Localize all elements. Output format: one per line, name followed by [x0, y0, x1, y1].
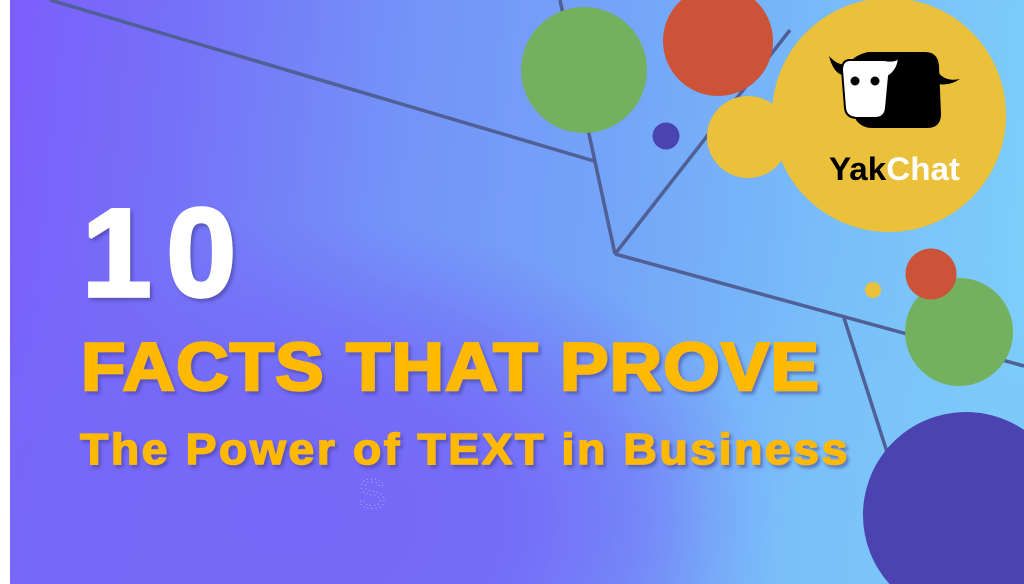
icon: yakchat logo [829, 52, 960, 128]
network lines [50, 0, 1024, 452]
circle: small yellow [865, 282, 881, 298]
circle: green top [521, 7, 647, 133]
headline: FACTS THAT PROVE [81, 329, 820, 405]
circle: green right [905, 278, 1013, 386]
circle: yakchat logo background [772, 0, 1006, 232]
circle: large indigo [863, 412, 1024, 584]
number 10: 10 [82, 184, 236, 323]
faint dotted mark: S [358, 470, 386, 517]
subheadline: The Power of TEXT in Business [80, 425, 850, 474]
circle: yellow medium [707, 96, 789, 178]
circle: red top [663, 0, 773, 96]
circle: red right [906, 248, 956, 300]
circle: small indigo [652, 122, 680, 150]
logo wordmark: YakChat [829, 151, 960, 187]
